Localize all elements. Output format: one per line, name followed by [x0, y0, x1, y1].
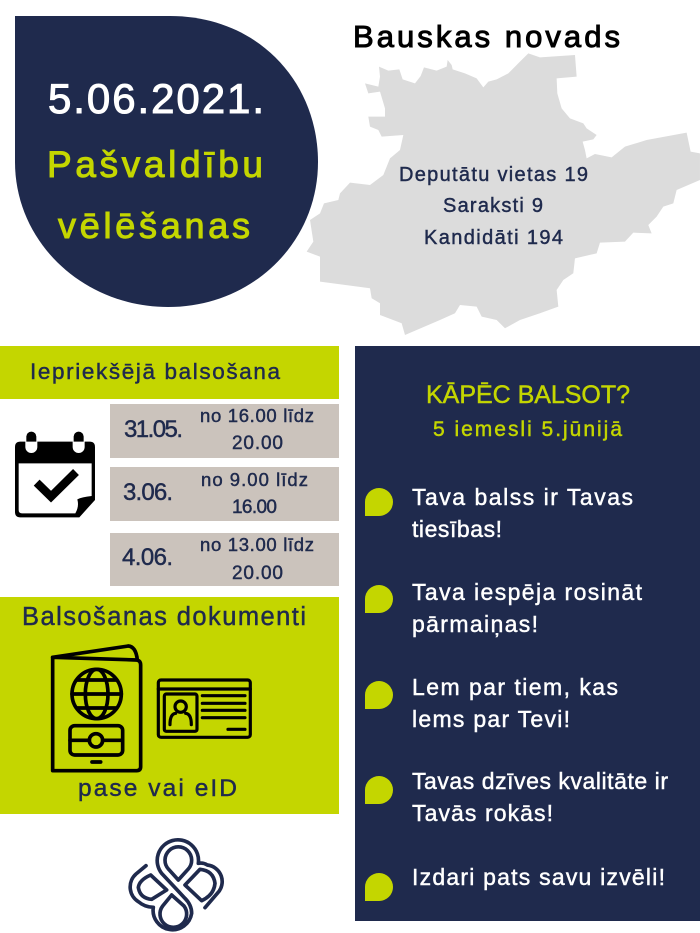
stat: candidates: Kandidāti 194: [424, 227, 563, 249]
lime banner: [0, 346, 339, 399]
reason three: [365, 674, 618, 732]
date: 4.06.: [122, 544, 173, 571]
reason four: Tavas dzīves kvalitāte ir: [412, 768, 668, 794]
lime background: [0, 597, 339, 814]
date: 3.06.: [123, 479, 173, 506]
documents heading: Balsošanas dokumenti: [22, 603, 306, 631]
time line one: no 16.00 līdz: [200, 405, 314, 426]
stat: seats: Deputātu vietas 19: [399, 164, 588, 186]
reason five: Izdari pats savu izvēli!: [412, 864, 665, 890]
icon: passport: [53, 646, 141, 771]
reason one: [365, 484, 633, 542]
time line two: 20.00: [232, 563, 283, 584]
navy rounded shape: [15, 16, 318, 307]
reason four: Tavās rokās!: [412, 800, 553, 826]
why vote subheading: 5 iemesli 5.jūnijā: [433, 418, 622, 441]
date box: [110, 404, 339, 458]
date box: [110, 467, 339, 521]
why vote heading: KĀPĒC BALSOT?: [426, 381, 630, 409]
panel: date and election title: [15, 16, 318, 307]
early voting title: Iepriekšējā balsošana: [30, 359, 280, 384]
panel: why vote: [355, 346, 700, 921]
panel: Bauska municipality: [307, 19, 700, 335]
panel: early voting date two: [110, 467, 339, 521]
panel: early voting date one: [110, 404, 339, 458]
reason two: pārmaiņas!: [412, 611, 538, 637]
title line two: vēlēšanas: [58, 205, 250, 246]
stat: lists: Saraksti 9: [443, 195, 543, 217]
icon: calendar with check mark: [15, 431, 95, 517]
icon: organisation logo: [130, 840, 222, 930]
navy background: [355, 346, 700, 921]
reason four: [365, 768, 668, 826]
date: 31.05.: [124, 416, 183, 443]
time line two: 16.00: [232, 497, 277, 518]
icon: eID card: [158, 680, 250, 737]
time line one: no 13.00 līdz: [200, 534, 314, 555]
time line one: no 9.00 līdz: [201, 469, 308, 490]
title line one: Pašvaldību: [47, 144, 263, 185]
date heading: 5.06.2021.: [48, 75, 264, 122]
map of Bauskas novads: [307, 53, 700, 335]
panel: voting documents: [0, 597, 339, 814]
panel: early voting heading: [0, 346, 339, 399]
documents caption: pase vai eID: [78, 775, 237, 802]
time line two: 20.00: [232, 433, 283, 454]
reason one: Tava balss ir Tavas: [412, 484, 633, 510]
reason three: Lem par tiem, kas: [412, 674, 618, 700]
municipality heading: Bauskas novads: [353, 19, 620, 54]
panel: early voting date three: [110, 533, 339, 586]
reason three: lems par Tevi!: [412, 706, 570, 732]
date box: [110, 533, 339, 586]
reason five: [365, 864, 665, 901]
reason one: tiesības!: [412, 516, 502, 542]
reason two: [365, 579, 643, 637]
reason two: Tava iespēja rosināt: [412, 579, 643, 605]
